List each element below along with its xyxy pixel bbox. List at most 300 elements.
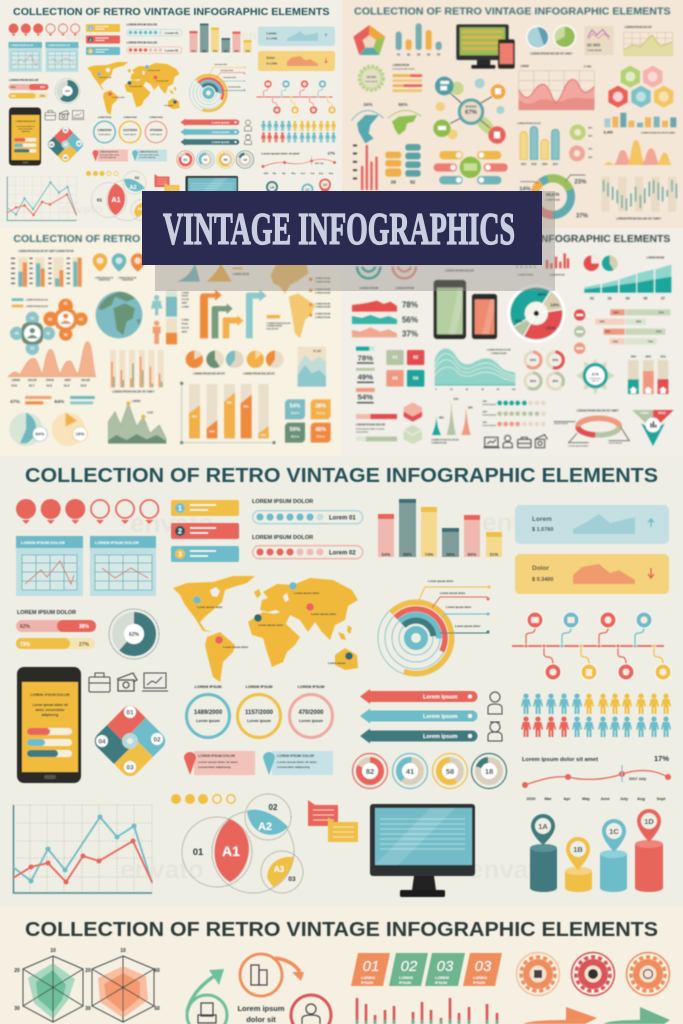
four-step diamond bbox=[90, 701, 170, 781]
tornado bars bbox=[574, 309, 670, 354]
stat card: Dolor: $ 0.3400 bbox=[532, 577, 553, 583]
small donuts: 45% bbox=[588, 126, 593, 129]
people comparison bars: DOLOR bbox=[182, 299, 189, 301]
3d ring callout bbox=[554, 409, 629, 448]
large progress columns: 68% bbox=[227, 400, 233, 404]
venn diagram: 02 bbox=[269, 803, 278, 812]
3d ring callout: LOREM IPSUM DOLOR SIT AMET bbox=[577, 409, 619, 413]
tablet and phone bbox=[434, 280, 497, 339]
title banner bbox=[142, 191, 542, 265]
legend bbox=[12, 298, 48, 308]
tornado bars: 38% bbox=[636, 320, 642, 324]
progress labels bbox=[356, 414, 397, 441]
progress labels: consectetur bbox=[356, 431, 368, 434]
mountain area chart: LOREM bbox=[132, 401, 140, 403]
bump chart bbox=[604, 140, 673, 165]
callout tags: consectetur adipiscing bbox=[277, 765, 310, 769]
stat card: Lorem: Lorem bbox=[532, 516, 552, 523]
bar chart: 88% bbox=[403, 552, 412, 557]
hexagon icons bbox=[608, 66, 673, 108]
tiny area rows: 56% bbox=[402, 315, 418, 324]
progress bars bbox=[16, 610, 96, 649]
stat card: Lorem bbox=[515, 505, 669, 544]
mini card bbox=[584, 26, 614, 55]
progress labels: LOREM IPSUM DOLOR bbox=[356, 423, 385, 427]
percent stack: 54% bbox=[358, 393, 373, 402]
stat tiles: 25,0 m bbox=[291, 411, 300, 415]
gear icons bbox=[516, 952, 670, 996]
striped list: Lorem ipsum dolor sit amet bbox=[393, 67, 415, 70]
area chart with peaks bbox=[8, 342, 96, 388]
stat tiles: 25,0 m bbox=[317, 411, 325, 415]
orange cross diagram: 04 bbox=[48, 317, 52, 321]
arrow banners: Lorem ipsum bbox=[423, 714, 458, 720]
bar chart bbox=[378, 499, 502, 557]
toggle hub bbox=[434, 151, 508, 184]
semi rings: LOREM IPSUM bbox=[395, 286, 415, 290]
arrow banners: Lorem ipsum bbox=[423, 734, 458, 740]
four-step diamond: 02 bbox=[153, 736, 161, 744]
semi rings bbox=[357, 267, 474, 290]
radar chart green: 10 bbox=[50, 948, 56, 954]
map pin row bbox=[16, 499, 158, 524]
numbered tiles: 04 bbox=[413, 375, 419, 380]
dot row bbox=[171, 794, 235, 804]
wave line chart bbox=[435, 349, 516, 391]
world map: Lorem ipsum dolor bbox=[223, 645, 249, 649]
sunburst badge: Lorem ipsum bbox=[590, 378, 601, 380]
radar chart green: 30 bbox=[14, 1006, 20, 1012]
cylinder pin chart: 1C bbox=[609, 827, 619, 836]
pie row: LOREM IPSUM DOLOR SIT bbox=[243, 373, 275, 376]
legend: LOREM IPSUM DOLOR bbox=[26, 306, 48, 308]
area chart with peaks: IPSUM bbox=[46, 380, 54, 382]
bar chart: 74% bbox=[424, 552, 434, 557]
column chart: LOREM IPSUM DOLOR SIT AMET CONSECTETUR bbox=[18, 250, 74, 253]
dot rating rows bbox=[483, 400, 546, 427]
small bar groups bbox=[517, 253, 568, 276]
small donuts: 68% bbox=[588, 157, 593, 159]
map fragment with callouts: LOREM IPSUM bbox=[315, 278, 330, 280]
circular gauges: 18 bbox=[485, 767, 493, 776]
progress bars: 27% bbox=[79, 642, 90, 648]
tiny area rows bbox=[352, 301, 418, 339]
small line chart card 2: LOREM IPSUM DOLOR bbox=[95, 540, 139, 545]
area chart with peaks: 15.6 bbox=[11, 384, 17, 388]
pies with badges: 16% bbox=[75, 432, 86, 437]
orange cross diagram bbox=[43, 299, 88, 341]
wave line chart: 60 bbox=[481, 389, 485, 391]
tiny area rows: 37% bbox=[402, 330, 418, 339]
map fragment with callouts: LOREM IPSUM bbox=[315, 303, 330, 305]
numbered tags: 02 bbox=[401, 958, 418, 975]
smartphone: adipiscing bbox=[42, 713, 58, 717]
tinted area card bbox=[298, 347, 326, 387]
sheet title: COLLECTION OF RETRO VINTAGE INFOGRAPHIC ELEMENTS bbox=[25, 465, 658, 487]
donut chart with percentages: 96,670 bbox=[546, 192, 560, 197]
people comparison bars: AMET bbox=[182, 331, 188, 334]
pale pyramids under banner bbox=[177, 263, 249, 282]
percent stack: 78% bbox=[358, 353, 373, 362]
numbered tags: LOREM bbox=[473, 976, 487, 980]
text: Lorem ipsum dolor sit bbox=[237, 1004, 285, 1024]
map fragment with callouts: LOREM IPSUM bbox=[315, 307, 330, 309]
cone chart: 67% bbox=[454, 399, 459, 401]
trend line: 2020 bbox=[527, 796, 536, 801]
circular gauges: 58 bbox=[446, 767, 454, 776]
thin vertical bars: LOREM IPSUM DOLOR SIT AMET bbox=[112, 389, 155, 393]
smartphone bbox=[17, 667, 81, 783]
circular gauges: 41 bbox=[406, 767, 414, 776]
bar chart: 54% bbox=[381, 552, 391, 557]
numbered tags: IPSUM bbox=[361, 981, 373, 985]
small bars: 02 bbox=[407, 53, 411, 57]
green cross diagram: 04 bbox=[15, 332, 19, 336]
concentric radial chart bbox=[366, 579, 490, 688]
numbered tags: LOREM bbox=[435, 976, 449, 980]
callout tags: LOREM IPSUM DOLOR bbox=[198, 754, 236, 758]
dot rating rows: Lorem ipsum bbox=[483, 425, 496, 427]
vertical meters: 43% bbox=[631, 354, 637, 358]
radar chart orange bbox=[85, 948, 160, 1022]
map fragment with callouts: DOLOR SIT bbox=[267, 328, 279, 330]
sunburst badge: dolor sit bbox=[592, 379, 599, 382]
pie chart with white border bbox=[507, 284, 566, 343]
striped list bbox=[393, 65, 422, 92]
cylinder pin chart bbox=[530, 809, 663, 892]
mini ring quartet bbox=[525, 352, 563, 389]
pie chart with white border: 31% bbox=[546, 325, 556, 330]
progress bars: 62% bbox=[20, 624, 31, 630]
people comparison bars: LOREM bbox=[182, 292, 189, 294]
venn diagram: A1 bbox=[222, 843, 240, 859]
outline icons row bbox=[483, 435, 547, 448]
venn diagram bbox=[182, 794, 303, 893]
four-step diamond: 04 bbox=[98, 738, 106, 746]
map fragment with callouts: LOREM IPSUM bbox=[315, 289, 330, 291]
text: Lorem ipsum dolor sit: Lorem ipsum bbox=[237, 1004, 285, 1013]
stat tiles: 25,0 m bbox=[317, 434, 325, 438]
donut chart with percentages: 37% bbox=[576, 213, 589, 219]
3d ring callout: Lorem ipsum bbox=[554, 423, 568, 425]
triangle diagram: IPSUM bbox=[658, 413, 666, 415]
large line chart bbox=[13, 805, 152, 893]
rounded bar chart: 2014 bbox=[521, 163, 527, 166]
large progress columns: 18% bbox=[261, 433, 267, 437]
stepped area chart bbox=[584, 257, 671, 300]
semi rings: LOREM IPSUM bbox=[359, 286, 379, 290]
trend line: 2017 July bbox=[629, 777, 647, 781]
tiny area rows: 78% bbox=[402, 301, 418, 310]
percent stack: 49% bbox=[358, 372, 373, 381]
sunburst badge bbox=[576, 358, 615, 395]
ring counters: LOREM IPSUM bbox=[195, 685, 221, 689]
vertical meters: 66% bbox=[646, 354, 652, 358]
tornado bars: 44% bbox=[599, 320, 605, 324]
numbered legend labels: 1 bbox=[178, 506, 182, 512]
ring counters: Lorem ipsum bbox=[299, 719, 324, 723]
map fragment with callouts: LOREM IPSUM bbox=[315, 314, 330, 316]
stacked database tiers: 26 bbox=[391, 180, 396, 185]
rounded bar chart: 2017 bbox=[553, 164, 559, 166]
ring counters: LOREM IPSUM bbox=[246, 685, 272, 689]
radar chart orange: 50 bbox=[154, 1006, 160, 1012]
icon: briefcase bbox=[89, 673, 110, 692]
small line chart card 2 bbox=[90, 536, 156, 596]
text: Lorem ipsum dolor sit: dolor sit bbox=[246, 1015, 276, 1024]
area chart with peaks: 45.7 bbox=[29, 384, 35, 388]
icon: people outlines bbox=[488, 692, 502, 741]
monitor and phone bbox=[456, 24, 515, 69]
numbered tags: 01 bbox=[363, 958, 379, 975]
small bars bbox=[396, 23, 442, 57]
small line chart card 1: LOREM IPSUM DOLOR bbox=[21, 540, 65, 545]
small donuts: 32% bbox=[588, 148, 593, 150]
mini card: 52 000 bbox=[587, 43, 601, 48]
pale pyramids under banner: LOREM IPSUM bbox=[233, 274, 249, 276]
smartphone: LOREM IPSUM DOLOR bbox=[30, 693, 70, 697]
title: COLLECTION OF RETRO VINTAGE INFOGRAPHIC ELEMENTS bbox=[25, 919, 658, 941]
stat card: Lorem: $ 1.0760 bbox=[532, 527, 553, 533]
watermarks: envato bbox=[469, 854, 553, 884]
small bars: 03 bbox=[417, 53, 421, 57]
four-step diamond: 01 bbox=[126, 710, 134, 716]
hub diagram: REVENUE bbox=[465, 106, 477, 108]
stepped area chart: 07 bbox=[661, 296, 665, 300]
rounded bar chart: 2015 bbox=[531, 164, 537, 166]
watermarks: envato bbox=[120, 854, 204, 884]
stat tiles: 38% bbox=[315, 404, 326, 410]
wave line chart: 40 bbox=[466, 388, 469, 391]
wave line chart: 20 bbox=[450, 389, 453, 391]
stepped area chart: 03 bbox=[608, 296, 612, 300]
venn diagram: A2 bbox=[258, 821, 272, 833]
stepped area chart: LOREM IPSUM bbox=[647, 257, 664, 260]
panel: main retro infographic sheet bbox=[13, 465, 671, 897]
pies with badges bbox=[9, 413, 87, 446]
tornado bars: 67% bbox=[659, 310, 665, 314]
dot rating rows: Lorem ipsum bbox=[483, 415, 496, 417]
mini ring quartet: 35% bbox=[552, 379, 559, 383]
mini ring quartet: 55% bbox=[552, 358, 559, 362]
callout tags bbox=[184, 751, 333, 775]
rounded bar chart: 2016 bbox=[542, 164, 548, 166]
radar chart orange: 60 bbox=[154, 968, 160, 974]
panel: retro elements sheet, top-left copy bbox=[7, 7, 336, 222]
3d ring callout: Lorem ipsum dolor bbox=[569, 446, 588, 448]
numbered legend labels: 3 bbox=[178, 552, 182, 558]
desktop monitor bbox=[370, 804, 475, 897]
red area chart: 7,700 bbox=[584, 64, 591, 68]
dot rating bars bbox=[252, 499, 363, 559]
numbered tags: LOREM bbox=[399, 976, 413, 980]
tornado bars: 67% bbox=[656, 330, 662, 334]
ring counters: LOREM IPSUM bbox=[298, 685, 324, 689]
watermarks: envato bbox=[130, 508, 214, 538]
numbered legend labels: 2 bbox=[178, 528, 182, 536]
small donuts: 65% bbox=[588, 136, 593, 138]
numbered tags: IPSUM bbox=[435, 981, 447, 985]
small bar groups: LOREM IPSUM bbox=[518, 274, 533, 276]
title: INFOGRAPHIC ELEMENTS bbox=[538, 234, 671, 245]
world map: Lorem ipsum dolor bbox=[258, 623, 284, 627]
mini percentage bars: 47% bbox=[10, 399, 21, 405]
panel: cream elements sheet, lower left bbox=[8, 234, 331, 446]
small donuts bbox=[571, 126, 593, 159]
bar chart: 65% bbox=[467, 552, 477, 557]
progress bars: 38% bbox=[79, 624, 90, 630]
stat tiles: 59% bbox=[290, 427, 301, 433]
concentric radial chart: Lorem ipsum dolor bbox=[440, 591, 466, 595]
pin icons bbox=[93, 253, 145, 282]
radar chart green bbox=[14, 948, 83, 1022]
candlestick chart: LOREM IPSUM DOLOR SIT AMET bbox=[616, 217, 661, 221]
map fragments with percentages: 34% bbox=[363, 102, 374, 107]
numbered tiles: 02 bbox=[413, 355, 419, 360]
icon: money bbox=[117, 673, 137, 691]
wave line chart: LOREM IPSUM DOLOR bbox=[487, 350, 511, 352]
wave line chart: 80 bbox=[497, 389, 500, 391]
percent stack bbox=[356, 347, 375, 403]
semi rings: LOREM IPSUM DOLOR bbox=[445, 268, 474, 272]
pin icons: LOREM IPSUM DOLOR bbox=[118, 278, 137, 280]
radar chart orange: 20 bbox=[85, 968, 91, 974]
dot rating bars: Lorem 01 bbox=[329, 516, 356, 522]
numbered legend labels bbox=[171, 500, 239, 562]
title: COLLECTION OF RETRO bbox=[13, 234, 141, 245]
trend line bbox=[522, 754, 671, 801]
mini card: Lorem ipsum bbox=[587, 50, 602, 52]
stat card: Dolor: Dolor bbox=[532, 565, 549, 572]
cone chart: LOREM IPSUM DOLOR SIT bbox=[431, 440, 460, 442]
panel: teal and red elements sheet, lower right bbox=[352, 234, 674, 448]
pie row bbox=[186, 351, 284, 376]
radar chart orange: 10 bbox=[120, 948, 126, 954]
area chart mini: LOREM IPSUM DOLOR bbox=[624, 26, 652, 29]
dot rating rows: 54% bbox=[483, 421, 487, 424]
area chart with peaks: AMET bbox=[64, 379, 72, 382]
timeline bbox=[512, 612, 671, 680]
column chart bbox=[11, 250, 82, 287]
globe bbox=[96, 292, 142, 338]
wave line chart: LOREM IPSUM bbox=[491, 353, 506, 355]
pie row: LOREM IPSUM DOLOR SIT bbox=[193, 373, 225, 376]
paired bars: 6,499 bbox=[604, 130, 613, 134]
stepped area chart: 05 bbox=[643, 296, 647, 300]
map fragment with callouts: LOREM IPSUM DOLOR bbox=[267, 323, 291, 325]
people comparison bars: AMET bbox=[182, 301, 188, 304]
stat tiles: 25,0 m bbox=[291, 434, 300, 438]
vertical meters bbox=[628, 354, 668, 394]
bar chart: 31% bbox=[489, 552, 499, 557]
dot rating rows: 54% bbox=[483, 400, 487, 403]
pie pair: LOREM IPSUM DOLOR SIT AMET bbox=[530, 51, 573, 55]
concentric radial chart: Lorem ipsum dolor bbox=[455, 624, 481, 628]
area chart with peaks: 19.6 bbox=[80, 384, 87, 388]
cylinder pin chart: 1D bbox=[644, 817, 654, 826]
3d ring callout: Lorem ipsum bbox=[609, 442, 622, 444]
cylinder pin chart: 1A bbox=[538, 822, 548, 831]
cone chart: 28% bbox=[439, 418, 445, 420]
people comparison bars: LOREM bbox=[182, 306, 189, 308]
pentagon diagram bbox=[353, 25, 385, 55]
sunburst badge: 678 bbox=[592, 372, 599, 377]
progress labels: Lorem ipsum dolor sit amet bbox=[356, 427, 385, 430]
hub diagram: 67% bbox=[465, 110, 478, 116]
people pictogram rows bbox=[521, 694, 671, 737]
paired bars bbox=[604, 113, 676, 134]
small bars: 04 bbox=[427, 53, 431, 57]
world map: Lorem ipsum bbox=[328, 661, 346, 665]
tornado bars: 28% bbox=[613, 310, 619, 314]
donut chart with percentages bbox=[519, 174, 589, 219]
world map: Lorem ipsum dolor bbox=[311, 612, 337, 616]
smartphone: amet, consectetur bbox=[35, 708, 65, 712]
red area chart bbox=[519, 64, 594, 110]
legend: LOREM IPSUM DOLOR bbox=[26, 300, 48, 302]
gear badge bbox=[359, 66, 383, 90]
dot rating rows: 54% bbox=[483, 411, 487, 414]
pie chart with white border: 16% bbox=[550, 303, 560, 308]
orange cross diagram: 03 bbox=[64, 333, 68, 337]
world map: Lorem ipsum dolor bbox=[197, 605, 223, 609]
pin icons: LOREM IPSUM bbox=[121, 280, 134, 282]
ring counters: 1489/2000 bbox=[194, 710, 223, 716]
banner shadow overlay bbox=[155, 191, 555, 291]
cylinder pin chart: 1B bbox=[573, 845, 583, 854]
map fragment with callouts: LOREM IPSUM bbox=[315, 292, 330, 294]
radar chart orange: 30 bbox=[85, 1006, 91, 1012]
map fragments with percentages: 66% bbox=[398, 102, 409, 107]
stacked database tiers: 52 bbox=[410, 180, 416, 185]
map fragments with percentages bbox=[351, 102, 421, 143]
red and green thin bars bbox=[357, 998, 497, 1024]
concentric radial chart: Lorem ipsum dolor bbox=[446, 605, 472, 609]
trend line: July bbox=[620, 796, 629, 801]
small bars: 05 bbox=[437, 53, 441, 57]
area chart with peaks: 15.8 bbox=[46, 384, 52, 388]
people comparison bars: IPSUM bbox=[182, 296, 188, 298]
pie pair bbox=[526, 25, 576, 55]
pin icons: LOREM IPSUM DOLOR bbox=[95, 278, 114, 280]
orange cross diagram: 02 bbox=[79, 317, 83, 321]
small bars: 01 bbox=[397, 53, 401, 57]
area chart mini bbox=[624, 26, 673, 56]
world map bbox=[173, 576, 358, 682]
area chart with peaks: DOLOR bbox=[28, 380, 37, 382]
ring counters bbox=[186, 685, 332, 738]
arrow banners bbox=[360, 689, 478, 744]
pie chart with white border: 45% bbox=[537, 292, 548, 297]
callout tags: LOREM IPSUM DOLOR bbox=[277, 754, 315, 758]
red thin bars bbox=[353, 145, 378, 190]
stat tiles bbox=[285, 399, 331, 443]
title: COLLECTION OF RETRO VINTAGE INFOGRAPHIC ELEMENTS bbox=[354, 7, 671, 18]
gear badge: Lorem ipsum bbox=[365, 80, 378, 83]
green cross diagram bbox=[10, 312, 55, 355]
green cross diagram: 01 bbox=[30, 317, 34, 321]
dot rating bars: LOREM IPSUM DOLOR bbox=[252, 535, 313, 541]
mini percentage bars: 64% bbox=[54, 399, 65, 405]
tinted area card: 87,467 bbox=[313, 349, 322, 353]
speech bubbles bbox=[308, 800, 358, 842]
mountain area chart: 5,700 bbox=[147, 412, 154, 414]
tornado bars: 24% bbox=[613, 339, 619, 343]
numbered tiles: 01 bbox=[392, 355, 398, 360]
mini percentage bars bbox=[10, 396, 95, 405]
icon: laptop bbox=[142, 673, 168, 691]
numbered tags: 03 bbox=[437, 958, 454, 975]
